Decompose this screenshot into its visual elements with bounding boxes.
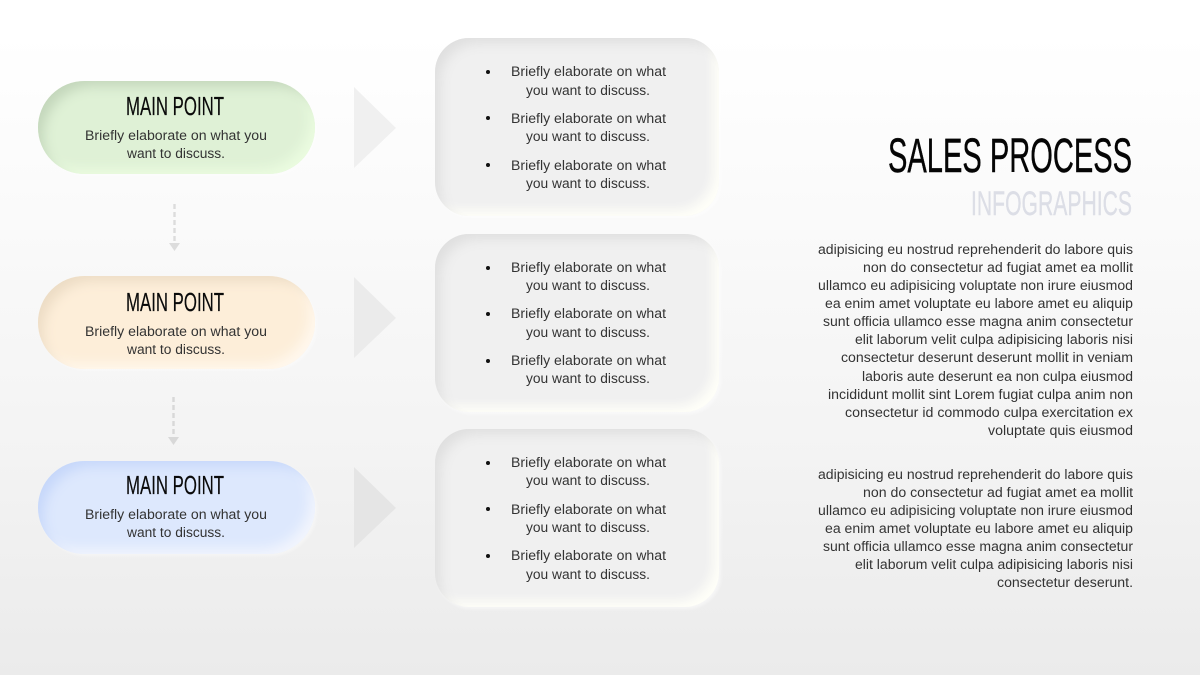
bullet list 2: you want to discuss. [526, 278, 650, 293]
bullet list 2 [486, 260, 666, 386]
bullet list 1: Briefly elaborate on what [511, 158, 666, 173]
bullet list 1: you want to discuss. [526, 176, 650, 191]
text block: paragraph 1: adipisicing eu nostrud reprehenderit do labore quis [818, 242, 1133, 257]
bullet list 1: Briefly elaborate on what [511, 111, 666, 126]
text block: paragraph 2: elit laborum velit culpa adipisicing laboris nisi [855, 557, 1133, 572]
text: description 2: Briefly elaborate on what you [85, 324, 267, 339]
heading: main point 1: MAIN POINT [126, 91, 224, 121]
text block: paragraph 1: consectetur id commodo culpa exercitation ex [845, 405, 1133, 420]
text block: paragraph 2: non do consectetur ad fugiat amet ea mollit [863, 485, 1133, 500]
text block: paragraph 1: non do consectetur ad fugiat amet ea mollit [863, 260, 1133, 275]
heading: main point 3: MAIN POINT [126, 470, 224, 500]
text block: paragraph 2: consectetur deserunt. [997, 575, 1133, 590]
bullet list 1: Briefly elaborate on what [511, 64, 666, 79]
bullet list 2: Briefly elaborate on what [511, 260, 666, 275]
text: description 3 [85, 507, 267, 540]
panel: bullet card 3 [435, 429, 719, 607]
arrow: triangle 2 [354, 277, 396, 358]
arrow: dashed connector 1 [169, 204, 180, 251]
bullet list 1 [486, 64, 666, 191]
text block: paragraph 2: sunt officia ullamco esse magna anim consectetur [823, 539, 1134, 554]
text block: paragraph 1: consectetur deserunt deserunt mollit in veniam [841, 350, 1133, 365]
panel: blue main point [38, 461, 315, 554]
text: description 2: want to discuss. [126, 342, 225, 357]
text: description 3: want to discuss. [126, 525, 225, 540]
heading: main point 2: MAIN POINT [126, 287, 224, 317]
text block: paragraph 2: ullamco eu adipisicing voluptate non irure eiusmod [818, 503, 1133, 518]
text block: paragraph 2 [818, 467, 1134, 590]
text: description 2 [85, 324, 267, 357]
bullet list 1: you want to discuss. [526, 129, 650, 144]
text block: paragraph 1: ea enim amet voluptate eu labore amet eu aliquip [825, 296, 1133, 311]
panel: bullet card 2 [435, 234, 719, 412]
panel: green main point [38, 81, 315, 174]
text block: paragraph 1: voluptate quis eiusmod [988, 423, 1133, 438]
bullet list 2: you want to discuss. [526, 371, 650, 386]
text: description 3: Briefly elaborate on what you [85, 507, 267, 522]
text block: paragraph 1 [818, 242, 1134, 438]
bullet list 3: you want to discuss. [526, 473, 650, 488]
bullet list 2: Briefly elaborate on what [511, 306, 666, 321]
text block: paragraph 1: ullamco eu adipisicing voluptate non irure eiusmod [818, 278, 1133, 293]
bullet list 3: Briefly elaborate on what [511, 548, 666, 563]
text: description 1: Briefly elaborate on what you [85, 128, 267, 143]
text block: paragraph 1: laboris aute deserunt ea non culpa eiusmod [862, 369, 1133, 384]
bullet list 3 [486, 455, 666, 582]
bullet list 1: you want to discuss. [526, 83, 650, 98]
bullet list 2: Briefly elaborate on what [511, 353, 666, 368]
bullet list 3: Briefly elaborate on what [511, 455, 666, 470]
bullet list 3: you want to discuss. [526, 520, 650, 535]
arrow: dashed connector 2 [168, 397, 179, 445]
text block: paragraph 2: ea enim amet voluptate eu labore amet eu aliquip [825, 521, 1133, 536]
arrow: triangle 3 [354, 467, 396, 548]
panel: bullet card 1 [435, 38, 719, 216]
text: description 1: want to discuss. [126, 146, 225, 161]
text: description 1 [85, 128, 267, 161]
panel: orange main point [38, 276, 315, 369]
text block: paragraph 2: adipisicing eu nostrud reprehenderit do labore quis [818, 467, 1133, 482]
text block: paragraph 1: incididunt mollit sint Lorem fugiat culpa anim non [828, 387, 1133, 402]
bullet list 2: you want to discuss. [526, 325, 650, 340]
arrow: triangle 1 [354, 87, 396, 168]
bullet list 3: you want to discuss. [526, 567, 650, 582]
text block: paragraph 1: elit laborum velit culpa adipisicing laboris nisi [855, 332, 1133, 347]
text block: paragraph 1: sunt officia ullamco esse magna anim consectetur [823, 314, 1134, 329]
bullet list 3: Briefly elaborate on what [511, 502, 666, 517]
